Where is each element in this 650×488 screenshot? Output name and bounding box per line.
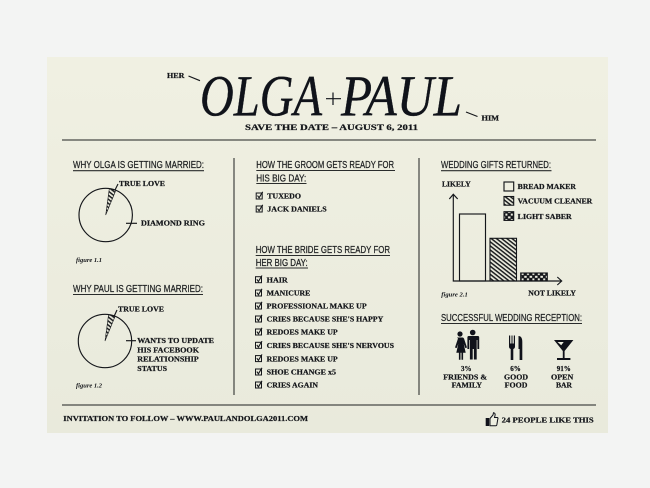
checklist: bride: REDOES MAKE UP bbox=[267, 355, 338, 363]
panel: card bbox=[47, 57, 608, 433]
title: OLGA + PAUL bbox=[200, 64, 462, 128]
checklist: bride: CRIES BECAUSE SHE'S HAPPY bbox=[267, 316, 383, 324]
stat: open bar bbox=[551, 365, 573, 390]
label: facebook status: WANTS TO UPDATE bbox=[137, 337, 214, 345]
legend bbox=[504, 182, 593, 221]
stat: friends and family: FRIENDS & bbox=[443, 373, 487, 381]
label: facebook status: RELATIONSHIP bbox=[137, 356, 200, 364]
stat: open bar: BAR bbox=[556, 382, 573, 390]
label: him: HIM bbox=[482, 115, 499, 123]
caption: figure 1.2: figure 1.2 bbox=[76, 382, 103, 390]
checklist: bride: SHOE CHANGE x5 bbox=[267, 369, 337, 377]
stat: friends and family: FAMILY bbox=[452, 382, 482, 390]
panel: wedding gifts bbox=[441, 159, 593, 299]
legend: VACUUM CLEANER bbox=[518, 198, 593, 206]
bar chart: gifts returned bbox=[449, 194, 562, 285]
heading: groom bbox=[256, 159, 395, 184]
checklist: bride: PROFESSIONAL MAKE UP bbox=[267, 303, 368, 311]
caption: figure 1.1: figure 1.1 bbox=[76, 257, 102, 264]
checklist: bride bbox=[256, 276, 394, 390]
label: diamond ring: DIAMOND RING bbox=[141, 220, 206, 228]
stat: good food: FOOD bbox=[505, 382, 527, 390]
axis label: likely: LIKELY bbox=[442, 181, 471, 189]
footer: likes: 24 PEOPLE LIKE THIS bbox=[502, 416, 594, 425]
pie chart: olga bbox=[79, 184, 137, 242]
label: facebook status: HIS FACEBOOK bbox=[137, 346, 200, 354]
pie chart: paul bbox=[78, 310, 136, 368]
panel: why olga bbox=[73, 159, 206, 264]
heading: bride bbox=[256, 244, 390, 269]
checklist: bride: REDOES MAKE UP bbox=[267, 329, 338, 337]
footer: invitation text: INVITATION TO FOLLOW – WWW.PAULANDOLGA2011.COM bbox=[63, 414, 308, 423]
panel: successful reception bbox=[441, 312, 582, 390]
stat: good food: GOOD bbox=[504, 373, 528, 381]
caption: figure 2.1: figure 2.1 bbox=[441, 292, 468, 299]
heading: bride: HOW THE BRIDE GETS READY FOR bbox=[256, 244, 390, 256]
checklist: bride: MANICURE bbox=[267, 290, 311, 298]
heading: groom: HOW THE GROOM GETS READY FOR bbox=[256, 159, 394, 171]
legend: LIGHT SABER bbox=[518, 213, 573, 221]
heading: bride: HER BIG DAY: bbox=[256, 257, 308, 269]
label: her: HER bbox=[167, 72, 186, 80]
checklist: bride: HAIR bbox=[267, 276, 289, 284]
label: her bbox=[167, 72, 200, 81]
label: true love: TRUE LOVE bbox=[119, 180, 165, 188]
checklist: bride: CRIES BECAUSE SHE'S NERVOUS bbox=[267, 342, 394, 350]
stat: friends and family bbox=[443, 365, 487, 390]
stat: friends and family: 3% bbox=[461, 365, 472, 373]
stat: open bar: OPEN bbox=[551, 373, 573, 381]
label: facebook status bbox=[137, 337, 214, 373]
divider top bbox=[62, 139, 596, 141]
panel: bride checklist bbox=[256, 244, 394, 390]
heading: why paul: WHY PAUL IS GETTING MARRIED: bbox=[73, 283, 203, 295]
icon: martini glass bbox=[554, 340, 573, 360]
icon: fork and knife bbox=[509, 336, 522, 360]
legend: BREAD MAKER bbox=[518, 183, 577, 191]
stat: open bar: 91% bbox=[557, 365, 571, 373]
heading: groom: HIS BIG DAY: bbox=[256, 172, 306, 184]
heading: gifts: WEDDING GIFTS RETURNED: bbox=[441, 159, 551, 171]
heading: why olga: WHY OLGA IS GETTING MARRIED: bbox=[73, 159, 204, 171]
label: him bbox=[466, 112, 499, 123]
axis label: not likely: NOT LIKELY bbox=[528, 290, 576, 298]
label: facebook status: STATUS bbox=[137, 365, 167, 373]
stat: good food: 6% bbox=[510, 365, 521, 373]
panel: groom checklist bbox=[256, 159, 395, 214]
label: true love: TRUE LOVE bbox=[118, 306, 164, 314]
stat: good food bbox=[504, 365, 528, 390]
title: OLGA + PAUL: OLGA bbox=[200, 64, 322, 128]
icon: thumbs up bbox=[486, 413, 498, 426]
checklist: groom bbox=[256, 192, 327, 214]
checklist: groom: JACK DANIELS bbox=[267, 206, 327, 214]
icon: couple bbox=[455, 330, 479, 360]
title: OLGA + PAUL: PAUL bbox=[340, 64, 462, 128]
heading: reception: SUCCESSFUL WEDDING RECEPTION: bbox=[441, 312, 582, 324]
panel: why paul bbox=[73, 283, 214, 390]
checklist: bride: CRIES AGAIN bbox=[267, 382, 318, 390]
subtitle: save the date: SAVE THE DATE – AUGUST 6, 2011 bbox=[245, 123, 418, 132]
checklist: groom: TUXEDO bbox=[267, 192, 302, 200]
